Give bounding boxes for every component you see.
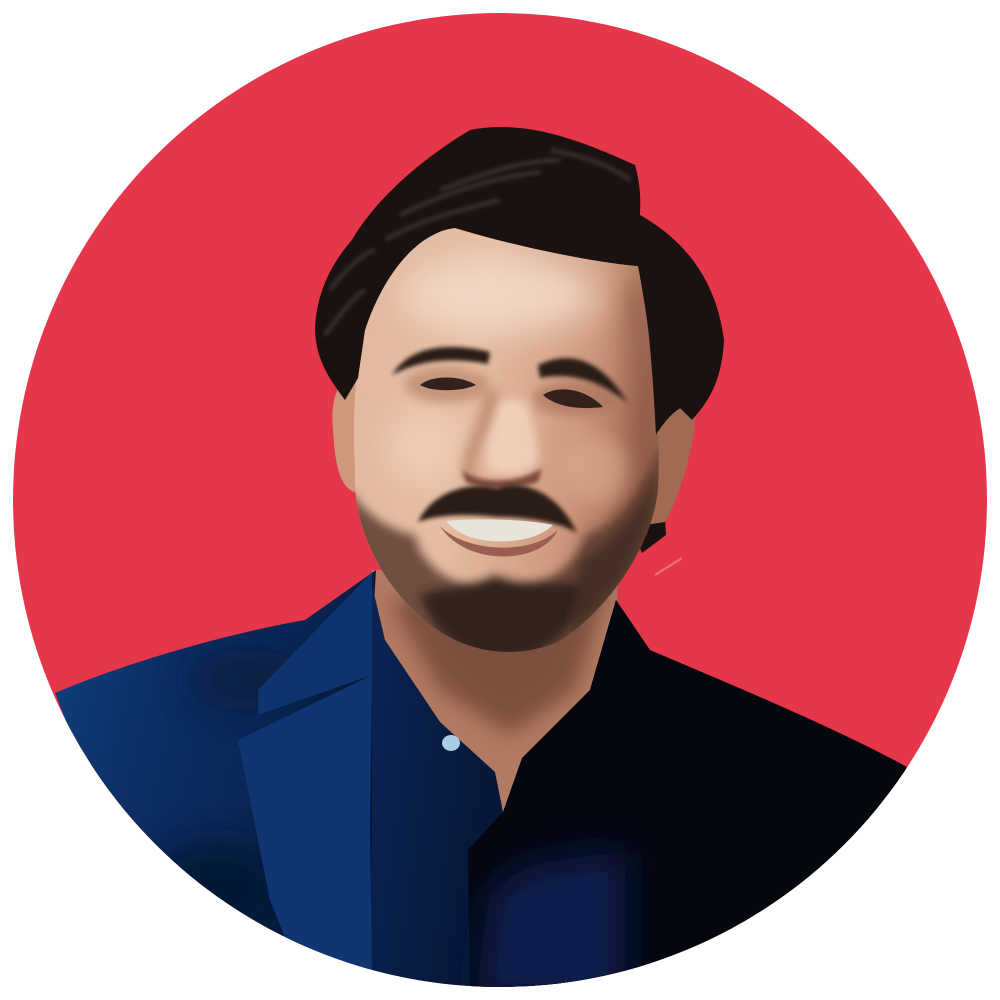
jaw beard right [570,480,655,635]
hair back [356,262,680,553]
forehead highlight [400,257,600,333]
lapel [258,572,372,715]
nose shadow [461,390,500,482]
person [55,127,907,1000]
left eye [420,378,476,390]
moustache [418,485,577,533]
nose [487,400,538,475]
right eyebrow [538,358,628,403]
shoulder shadow [190,650,310,710]
chin beard [420,575,585,661]
eye socket right [533,380,617,416]
hair top [315,127,724,435]
nostril shadow [462,468,542,488]
face [354,228,659,652]
jacket shading [156,636,292,933]
shirt button [442,735,460,751]
face right shadow [618,278,658,496]
right cheek [563,435,627,505]
hair highlights [325,150,630,335]
teeth [446,519,553,541]
eye socket left [405,367,489,403]
lower lip [440,526,558,557]
red streak [655,558,682,575]
face shading [345,257,665,661]
ear right [650,408,695,524]
neck [372,570,618,812]
left cheek highlight [387,407,463,483]
beard [356,445,659,652]
shirt [370,585,660,1000]
jacket right side [616,600,907,1000]
neck shadow [390,580,610,735]
navy shirt front [475,850,625,1000]
left eyebrow [392,347,490,375]
ear left [332,378,358,493]
lower lapel [238,675,372,975]
shirt dark placket [468,600,660,1000]
lower shadow [145,840,285,940]
jacket left side [55,570,385,1000]
right eye [543,389,603,408]
